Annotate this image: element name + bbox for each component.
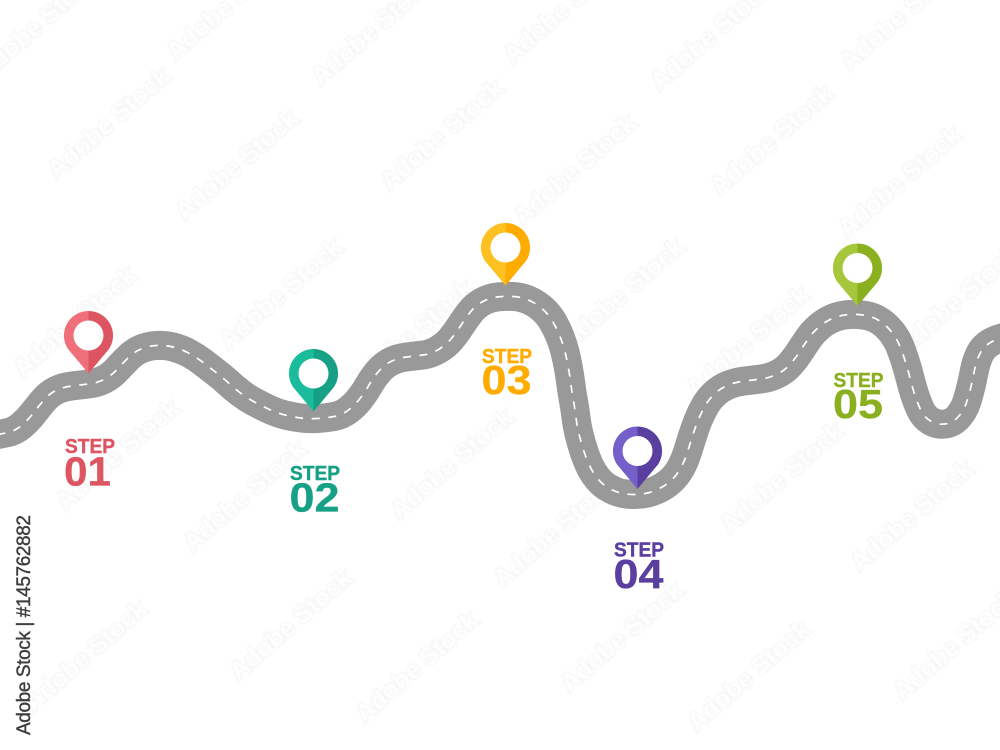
- watermark pattern: Adobe Stock: [8, 261, 142, 383]
- watermark pattern: Adobe Stock: [845, 455, 979, 577]
- pin 4: purple: [613, 426, 662, 489]
- watermark pattern: Adobe Stock: [705, 79, 839, 201]
- step 05 label: STEP: [834, 370, 884, 392]
- watermark pattern: Adobe Stock: [556, 233, 690, 355]
- watermark pattern: Adobe Stock: [508, 109, 642, 231]
- step 02 label: 02: [290, 474, 340, 520]
- watermark pattern: Adobe Stock: [19, 595, 153, 717]
- watermark pattern: Adobe Stock: [170, 104, 304, 226]
- watermark pattern: Adobe Stock: [488, 471, 622, 593]
- winding road: [0, 296, 1000, 494]
- watermark pattern: Adobe Stock: [385, 403, 519, 525]
- watermark pattern: Adobe Stock: [178, 435, 312, 557]
- stock id side text: Adobe Stock | #145762882: [14, 515, 35, 735]
- watermark pattern: Adobe Stock: [833, 121, 967, 243]
- step 01 label: 01: [64, 448, 111, 494]
- watermark pattern: Adobe Stock: [681, 281, 815, 403]
- watermark pattern: Adobe Stock: [224, 564, 358, 686]
- step 05 label: 05: [833, 381, 883, 427]
- step 01 label: STEP: [65, 436, 115, 458]
- watermark pattern: Adobe Stock: [555, 576, 689, 698]
- watermark pattern: Adobe Stock: [345, 274, 479, 396]
- pin 5: green: [833, 243, 882, 306]
- step 04 label: 04: [614, 551, 664, 597]
- pin 3: yellow: [481, 223, 530, 286]
- step 02 label: STEP: [290, 463, 340, 485]
- watermark pattern: Adobe Stock: [375, 74, 509, 196]
- step 04 label: STEP: [614, 540, 664, 562]
- watermark pattern: Adobe Stock: [214, 233, 348, 355]
- step 03 label: 03: [482, 357, 532, 403]
- watermark pattern: Adobe Stock: [350, 606, 484, 728]
- watermark pattern: Adobe Stock: [51, 394, 185, 516]
- watermark pattern: Adobe Stock: [682, 615, 816, 737]
- pin 1: red: [64, 311, 113, 374]
- step 03 label: STEP: [482, 346, 532, 368]
- pin 2: teal: [289, 349, 338, 412]
- watermark pattern: Adobe Stock: [42, 62, 176, 184]
- watermark pattern: Adobe Stock: [715, 417, 849, 539]
